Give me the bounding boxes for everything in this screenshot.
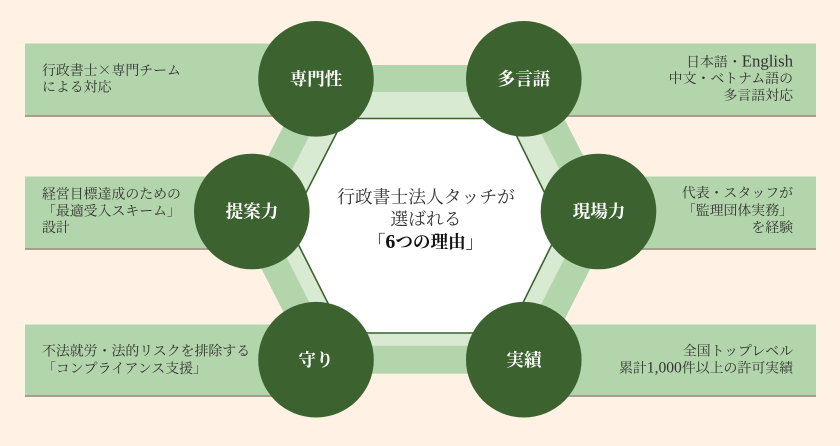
panel: 提案力 description band (25, 176, 252, 250)
panel: 現場力 description band: 「監理団体実務」 (682, 202, 793, 219)
panel: 提案力 description band: 設計 (42, 220, 70, 236)
panel: 専門性 description band (25, 44, 316, 117)
circle: 専門性 (258, 21, 374, 137)
panel: 多言語 description band: 中文・ベトナム語の (669, 70, 793, 87)
circle: 提案力 (194, 154, 310, 269)
panel: 多言語 description band: 日本語・English (686, 52, 794, 70)
circle: 多言語 (466, 21, 582, 137)
panel: 現場力 description band: を経験 (751, 220, 793, 236)
panel: 守り description band: 「コンプライアンス支援」 (42, 360, 207, 377)
hexagon frame (236, 65, 616, 374)
circle: 守り: 守り (298, 350, 334, 370)
panel: 実績 description band (524, 324, 816, 397)
central white hexagon with title: 「6つの理由」 (368, 231, 483, 253)
panel: 現場力 description band: 代表・スタッフが (682, 186, 793, 202)
panel: 実績 description band: 全国トップレベル (683, 344, 793, 360)
central white hexagon with title: 行政書士法人タッチが (337, 187, 515, 207)
central white hexagon with title (289, 118, 561, 333)
panel: 提案力 description band: 「最適受入スキーム」 (42, 202, 181, 220)
panel: 守り description band: 不法就労・法的リスクを排除する (42, 342, 250, 360)
circle: 守り (258, 302, 374, 418)
panel: 多言語 description band (524, 44, 816, 117)
circle: 専門性: 専門性 (290, 69, 343, 89)
panel: 多言語 description band: 多言語対応 (724, 87, 794, 104)
panel: 専門性 description band: 行政書士×専門チーム (42, 59, 181, 79)
central white hexagon with title: 選ばれる (390, 209, 462, 229)
circle: 提案力: 提案力 (226, 202, 278, 222)
circle: 多言語: 多言語 (498, 69, 551, 89)
panel: 現場力 description band (598, 176, 816, 250)
panel: 提案力 description band: 経営目標達成のための (42, 186, 181, 202)
panel: 専門性 description band: による対応 (42, 78, 113, 96)
circle: 実績 (466, 302, 582, 418)
circle: 実績: 実績 (506, 350, 544, 370)
circle: 現場力 (541, 154, 656, 269)
panel: 実績 description band: 累計1,000件以上の許可実績 (619, 360, 794, 376)
panel: 守り description band (25, 324, 316, 397)
circle: 現場力: 現場力 (573, 202, 625, 222)
